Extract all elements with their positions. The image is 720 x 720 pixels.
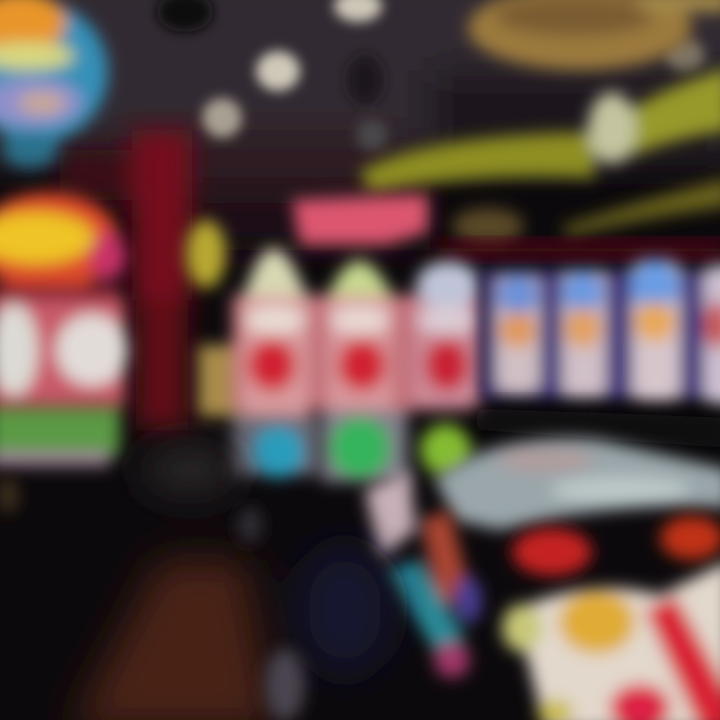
red chips row <box>512 516 720 576</box>
foreground colourful stand <box>365 470 482 678</box>
balloon sign <box>0 0 108 168</box>
left lit sign <box>0 192 128 466</box>
red band above machines <box>440 242 720 258</box>
red pillar <box>60 130 192 430</box>
gold ceiling ring <box>468 0 720 70</box>
foreground bright panel <box>502 560 720 720</box>
foreground seat highlights <box>0 477 305 720</box>
dark ledge under machines <box>470 408 720 448</box>
ceiling lights <box>157 0 705 151</box>
distant slot machines <box>482 259 720 405</box>
ceiling <box>0 0 720 250</box>
floor and foreground silhouettes <box>70 445 395 720</box>
yellow-green balcony bands <box>360 68 720 244</box>
slot machine bank <box>186 194 482 482</box>
game table <box>435 438 720 530</box>
